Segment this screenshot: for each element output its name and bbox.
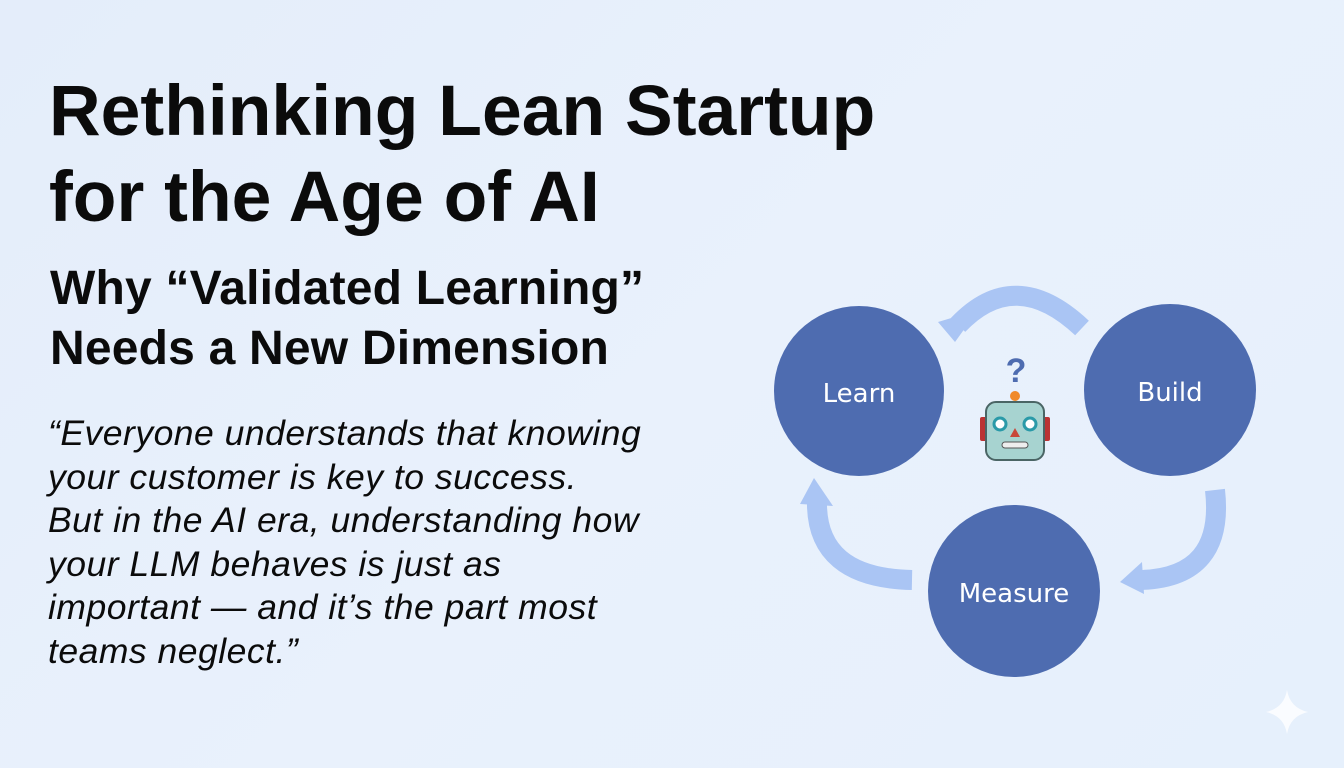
quote: important — and it’s the part most: [48, 587, 597, 627]
quote: teams neglect.”: [48, 630, 298, 670]
circle: build: [1084, 304, 1256, 476]
arrow: right: [1120, 490, 1216, 594]
circle: measure: [928, 505, 1100, 677]
title: [49, 71, 875, 237]
decorative sparkle: [1266, 690, 1308, 734]
quote: your LLM behaves is just as: [48, 544, 502, 584]
title: for the Age of AI: [49, 157, 600, 237]
circle: learn: Learn: [823, 379, 895, 409]
arrow: top: [938, 296, 1082, 342]
subtitle: [50, 262, 644, 375]
icon: robot with question mark: ?: [1006, 352, 1026, 390]
circle: measure: Measure: [959, 579, 1069, 609]
subtitle: Why “Validated Learning”: [50, 262, 644, 315]
arrow: left: [800, 478, 912, 580]
quote: your customer is key to success.: [48, 456, 577, 496]
title: Rethinking Lean Startup: [49, 71, 875, 151]
icon: robot with question mark: [980, 352, 1050, 460]
circle: build: Build: [1137, 378, 1203, 408]
circle: learn: [774, 306, 944, 476]
subtitle: Needs a New Dimension: [50, 322, 609, 375]
quote: [46, 413, 641, 670]
quote: “Everyone understands that knowing: [48, 413, 641, 453]
quote: But in the AI era, understanding how: [48, 500, 639, 540]
